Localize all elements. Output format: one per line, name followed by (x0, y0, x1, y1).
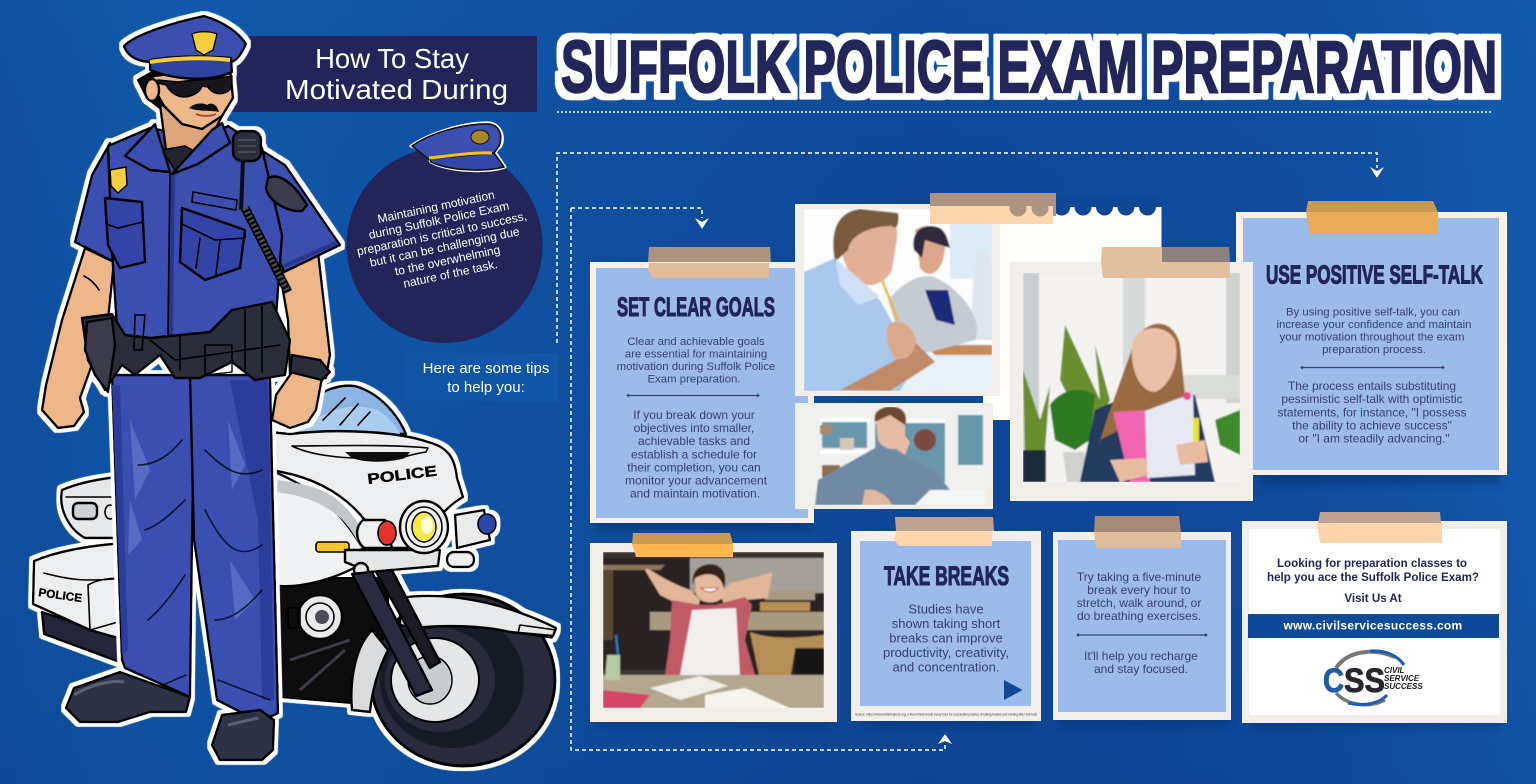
card: use positive self-talk (1236, 201, 1507, 475)
amber signal (316, 542, 349, 552)
heading banner: How To Stay Motivated During (228, 36, 537, 112)
photo: student thinking with pencil (795, 204, 1000, 396)
right arm skin (278, 252, 330, 378)
logo: Civil Service Success: CIVIL (1384, 666, 1405, 675)
body text: Studies have (908, 602, 984, 616)
tape (1306, 201, 1438, 234)
tape (632, 533, 733, 557)
card: try taking a break: It'll help you recharge (1084, 649, 1198, 663)
body text: and concentration. (893, 660, 999, 674)
engine round cover (298, 595, 342, 639)
card: take breaks (851, 517, 1041, 721)
body text (617, 336, 775, 386)
small turn light (447, 552, 474, 567)
duty belt (82, 302, 290, 390)
shirt torso (108, 126, 282, 345)
logo: Civil Service Success: C (1323, 662, 1344, 700)
shoulder patch (266, 177, 307, 211)
body text: productivity, creativity, (883, 645, 1009, 660)
body text (1077, 570, 1201, 623)
neck (160, 105, 224, 168)
circle intro text panel: preparation is critical to success, (356, 209, 528, 259)
cap badge (192, 32, 217, 55)
body text: are essential for maintaining (625, 348, 767, 360)
right boot (212, 710, 274, 760)
tips label: Here are some tips (423, 360, 549, 377)
card: try taking a break: and stay focused. (1094, 662, 1188, 676)
sunglasses (158, 76, 232, 97)
heading banner: How To Stay Motivated During: How To Stay (315, 43, 469, 74)
photo: student with pink folder (1010, 247, 1253, 501)
call to action text: help you ace the Suffolk Police Exam? (1267, 571, 1479, 584)
tape (648, 247, 771, 278)
illustration: police motorcycle (33, 386, 556, 766)
fork (352, 572, 432, 696)
body text (1276, 306, 1472, 356)
left arm skin (42, 248, 114, 428)
red light (357, 520, 392, 548)
card: use positive self-talk: or "I am steadily advancing." (1298, 432, 1450, 446)
photo: relaxed student in cafe (590, 533, 837, 722)
card: set clear goals: their completion, you can (627, 460, 761, 474)
tips label (405, 353, 559, 401)
call to action text (1267, 557, 1479, 605)
left boot (66, 672, 190, 722)
heading: TAKE BREAKS (884, 561, 1009, 591)
card: use positive self-talk: The process entails substituting (1288, 379, 1456, 393)
body text: Clear and achievable goals (627, 336, 765, 348)
left sleeve (75, 143, 122, 262)
circle intro text panel: nature of the task. (402, 257, 499, 291)
logo: Civil Service Success: SERVICE (1384, 674, 1420, 683)
card: set clear goals: and maintain motivation. (630, 486, 760, 500)
tyre (371, 594, 555, 766)
rear top case (61, 476, 125, 538)
call to action text: Looking for preparation classes to (1277, 557, 1467, 570)
body text: stretch, walk around, or (1077, 596, 1201, 610)
body text: breaks can improve (889, 630, 1003, 646)
card: use positive self-talk: statements, for instance, "I possess (1277, 406, 1467, 420)
body text: motivation during Suffolk Police (617, 361, 775, 373)
chest pocket right (180, 208, 245, 280)
connector arrow: to self-talk card (557, 153, 1384, 343)
illustration: police officer (42, 16, 340, 760)
lower fender (351, 630, 388, 712)
windshield (285, 386, 406, 434)
body text: Exam preparation. (647, 374, 741, 386)
side case (33, 543, 125, 640)
body text: your motivation throughout the exam (1280, 332, 1464, 344)
scalloped paper note (983, 196, 1162, 420)
card: set clear goals (590, 247, 814, 523)
front bracket (345, 550, 440, 572)
heading: SET CLEAR GOALS (617, 292, 775, 322)
card: set clear goals: If you break down your (633, 408, 755, 422)
hair and ear (138, 66, 165, 108)
tape (1101, 247, 1230, 278)
website bar (1248, 614, 1499, 638)
circle intro text panel: but it can be challenging due (368, 224, 521, 270)
moustache and mouth (189, 103, 219, 112)
body text: increase your confidence and maintain (1276, 319, 1472, 331)
tape across photo and note (930, 193, 1056, 224)
side case base (42, 612, 125, 664)
name plate (192, 192, 237, 210)
trousers right leg (190, 375, 278, 722)
card: set clear goals: establish a schedule for (631, 448, 757, 462)
body text: break every hour to (1087, 583, 1191, 597)
photo: smiling student at bookshelf (795, 403, 993, 509)
logo: Civil Service Success: SUCCESS (1384, 682, 1423, 691)
body text (883, 602, 1009, 674)
connector arrow: to goals card and take breaks card (571, 208, 952, 750)
tape (894, 517, 994, 546)
right sleeve (245, 140, 340, 272)
body text: preparation process. (1322, 344, 1426, 356)
card: try taking a break (1053, 516, 1231, 720)
card: use positive self-talk: the ability to achieve success" (1292, 418, 1452, 432)
call to action text: Visit Us At (1344, 592, 1402, 605)
body text: shown taking short (892, 616, 1001, 631)
badge (110, 167, 127, 193)
logo: Civil Service Success: SS (1344, 662, 1385, 700)
icon: play triangle (1004, 680, 1022, 700)
tape (1094, 516, 1181, 548)
heading banner: How To Stay Motivated During: Motivated During (285, 74, 508, 105)
face (152, 68, 233, 129)
body text: Try taking a five-minute (1077, 570, 1201, 584)
card: use positive self-talk: pessimistic self-talk with optimistic (1281, 392, 1463, 406)
body text: do breathing exercises. (1077, 609, 1201, 623)
website bar: www.civilservicesuccess.com (1282, 618, 1463, 632)
card shadows (595, 470, 1500, 728)
peaked cap (124, 16, 246, 62)
body text: By using positive self-talk, you can (1286, 306, 1460, 318)
tips label: to help you: (447, 379, 525, 396)
source note: Source: https://www.betterhelpers.org, a five-minute break every hour for successful practice of taking breaks and moving after intervals (855, 712, 1037, 716)
police label on side case: POLICE (38, 587, 83, 605)
trousers left leg (112, 375, 195, 697)
rear mudguard / body (270, 470, 368, 586)
headlight (400, 501, 448, 553)
police label on fairing: POLICE (367, 464, 438, 488)
collar (125, 124, 170, 172)
circle intro text panel: to the overwhelming (394, 242, 501, 278)
engine (270, 578, 390, 703)
circle intro text panel (346, 147, 542, 343)
card: set clear goals: achievable tasks and (638, 434, 750, 448)
icon: police cap on circle (411, 123, 505, 171)
logo: Civil Service Success (1323, 651, 1423, 705)
undershirt (162, 146, 196, 172)
right hand (272, 372, 322, 428)
card: call to action (1242, 512, 1507, 723)
wristwatch (290, 355, 330, 380)
radio mic and cord (233, 131, 261, 161)
circle intro text panel: Maintaining motivation (376, 188, 496, 226)
fairing (270, 431, 463, 548)
front mudguard (400, 596, 556, 636)
circle intro text panel: during Suffolk Police Exam (367, 198, 510, 242)
tape (1317, 512, 1442, 543)
blue light (455, 510, 490, 548)
card: set clear goals: objectives into smaller, (634, 421, 754, 435)
card: set clear goals: monitor your advancement (625, 474, 768, 488)
wheel rim (391, 638, 479, 722)
chest pocket left (105, 198, 145, 268)
